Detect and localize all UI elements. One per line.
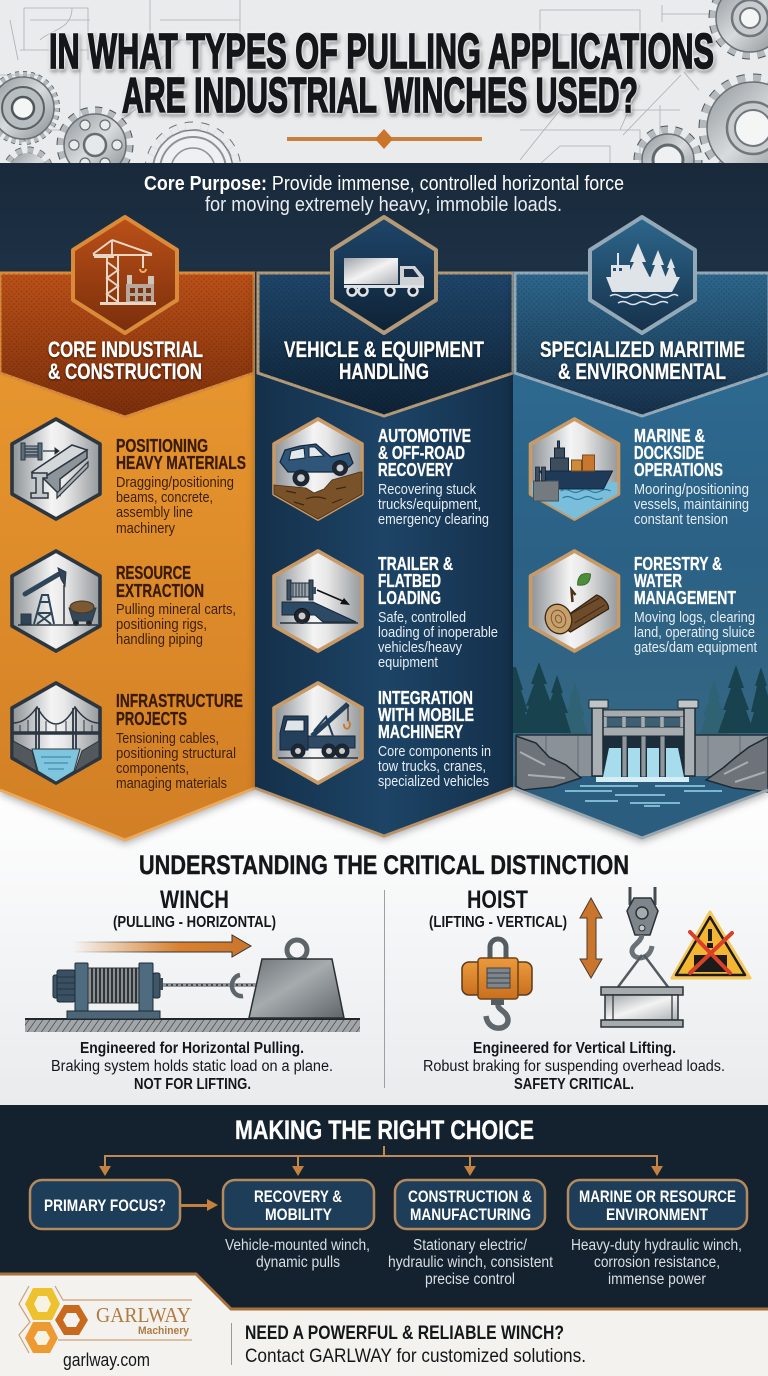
recovery recommendation: dynamic pulls xyxy=(256,1254,340,1271)
text xyxy=(378,688,491,790)
box: marine or resource environment: ENVIRONMENT xyxy=(606,1205,708,1224)
text: components, xyxy=(116,760,189,777)
text: Pulling mineral carts, xyxy=(116,601,236,618)
icon: warning no lifting xyxy=(672,912,750,978)
text: FLATBED xyxy=(378,571,441,591)
icon: suspension bridge xyxy=(12,683,100,783)
marine recommendation xyxy=(571,1237,742,1288)
illustration: dam and forest xyxy=(513,662,768,837)
text xyxy=(378,426,489,528)
text: vehicles/heavy xyxy=(378,639,462,656)
construction recommendation xyxy=(388,1237,554,1288)
text: MARINE & xyxy=(634,426,705,446)
text: positioning structural xyxy=(116,745,236,762)
hoist heading xyxy=(429,886,567,931)
construction recommendation: hydraulic winch, consistent xyxy=(388,1254,554,1271)
section background: critical distinction xyxy=(0,780,768,1105)
icon: cargo ship xyxy=(530,419,618,519)
icon: truck hexagon xyxy=(332,217,436,333)
panel: vehicle and equipment handling xyxy=(255,217,513,836)
text: Mooring/positioning xyxy=(634,481,749,498)
winch heading xyxy=(113,886,276,931)
text: AUTOMOTIVE xyxy=(378,426,471,446)
panel: specialized maritime and environmental xyxy=(513,217,768,838)
arrow: vertical lift xyxy=(580,898,602,978)
text: EXTRACTION xyxy=(116,581,204,601)
icon: oil pump xyxy=(12,551,100,651)
text: specialized vehicles xyxy=(378,773,489,790)
arrow: horizontal pull xyxy=(73,935,251,957)
text: POSITIONING xyxy=(116,436,208,456)
text: machinery xyxy=(116,520,175,537)
text xyxy=(116,563,236,648)
header background with gears and blueprint lines xyxy=(0,0,768,214)
winch description: NOT FOR LIFTING. xyxy=(134,1076,251,1093)
text: assembly line xyxy=(116,504,193,521)
marine recommendation: immense power xyxy=(608,1271,706,1288)
construction recommendation: Stationary electric/ xyxy=(413,1237,528,1254)
text: Tensioning cables, xyxy=(116,730,219,747)
winch description: Braking system holds static load on a plane. xyxy=(51,1058,333,1075)
gear: left xyxy=(0,74,57,142)
text xyxy=(378,554,498,671)
box: construction and manufacturing: CONSTRUCTION & xyxy=(408,1187,532,1206)
logo: garlway.com xyxy=(63,1350,150,1370)
item: marine and dockside operations xyxy=(530,419,749,528)
box: construction and manufacturing xyxy=(395,1180,545,1229)
winch description xyxy=(51,1040,333,1093)
box: primary focus: PRIMARY FOCUS? xyxy=(44,1196,166,1215)
illustration: winch pulling load xyxy=(25,940,360,1032)
gear: center left xyxy=(61,111,129,179)
item: automotive and off-road recovery xyxy=(274,419,489,528)
gear: bottom left xyxy=(6,150,50,194)
core purpose text xyxy=(144,173,624,216)
text: equipment xyxy=(378,654,439,671)
gear: top right xyxy=(713,0,768,55)
text: Safe, controlled xyxy=(378,609,466,626)
text: constant tension xyxy=(634,511,728,528)
call to action: NEED A POWERFUL & RELIABLE WINCH? xyxy=(245,1323,564,1344)
text: positioning rigs, xyxy=(116,616,207,633)
box: recovery and mobility: MOBILITY xyxy=(265,1205,333,1224)
text: tow trucks, cranes, xyxy=(378,758,486,775)
text: INTEGRATION xyxy=(378,688,473,708)
text: PROJECTS xyxy=(116,709,187,729)
call to action: Contact GARLWAY for customized solutions. xyxy=(245,1346,586,1367)
heading: & CONSTRUCTION xyxy=(48,359,202,384)
heading: critical distinction: UNDERSTANDING THE CRITICAL DISTINCTION xyxy=(139,850,629,880)
hoist description: Robust braking for suspending overhead loads. xyxy=(423,1058,725,1075)
logo xyxy=(19,1286,192,1370)
box: primary focus xyxy=(30,1180,180,1229)
text: emergency clearing xyxy=(378,511,489,528)
text: MACHINERY xyxy=(378,722,463,742)
icon: off-road vehicle xyxy=(274,419,362,519)
text: trucks/equipment, xyxy=(378,496,481,513)
item: forestry and water management xyxy=(530,551,758,656)
logo: GARLWAY xyxy=(96,1303,191,1327)
text xyxy=(116,436,246,537)
text: WATER xyxy=(634,571,682,591)
winch heading: WINCH xyxy=(160,886,229,914)
light trees xyxy=(562,680,728,734)
icon: electric hoist xyxy=(462,939,532,1028)
recovery recommendation xyxy=(225,1237,370,1271)
text: managing materials xyxy=(116,775,227,792)
text: Recovering stuck xyxy=(378,481,476,498)
gear: bottom right xyxy=(638,130,698,190)
gears xyxy=(0,0,768,214)
item: positioning heavy materials xyxy=(12,419,246,537)
box: recovery and mobility: RECOVERY & xyxy=(254,1187,342,1206)
text: MANAGEMENT xyxy=(634,588,736,608)
text: OPERATIONS xyxy=(634,460,723,480)
logo: Machinery xyxy=(138,1325,190,1337)
heading: & ENVIRONMENTAL xyxy=(558,359,726,384)
panel: core industrial and construction xyxy=(0,217,255,840)
heading xyxy=(48,337,203,384)
heading xyxy=(284,337,484,384)
hoist description: SAFETY CRITICAL. xyxy=(514,1076,634,1093)
construction recommendation: precise control xyxy=(425,1271,515,1288)
text: beams, concrete, xyxy=(116,489,213,506)
box: marine or resource environment xyxy=(568,1180,747,1229)
text xyxy=(634,554,758,656)
text: LOADING xyxy=(378,588,441,608)
item: trailer and flatbed loading xyxy=(274,551,498,671)
text: FORESTRY & xyxy=(634,554,722,574)
text: RECOVERY xyxy=(378,460,453,480)
hoist heading: HOIST xyxy=(467,886,528,914)
heading: MAKING THE RIGHT CHOICE xyxy=(235,1115,534,1145)
core purpose text: Core Purpose: Provide immense, controlled horizontal force xyxy=(144,173,624,195)
marine recommendation: Heavy-duty hydraulic winch, xyxy=(571,1237,742,1254)
flow connectors xyxy=(99,1146,663,1176)
text: WITH MOBILE xyxy=(378,705,474,725)
text xyxy=(116,691,243,792)
box: construction and manufacturing: MANUFACTURING xyxy=(410,1205,531,1224)
center divider xyxy=(384,890,385,1088)
illustration: hook and load xyxy=(601,887,683,1027)
text: handling piping xyxy=(116,631,203,648)
panel: making the right choice xyxy=(0,1105,768,1310)
item: integration with mobile machinery xyxy=(274,683,491,790)
arrow to recovery xyxy=(181,1199,218,1211)
text: RESOURCE xyxy=(116,563,191,583)
panel: winch xyxy=(25,886,360,1093)
text: INFRASTRUCTURE xyxy=(116,691,243,711)
item: infrastructure projects xyxy=(12,683,243,792)
heading: HANDLING xyxy=(339,359,429,384)
text: HEAVY MATERIALS xyxy=(116,453,246,473)
text: vessels, maintaining xyxy=(634,496,749,513)
text: TRAILER & xyxy=(378,554,453,574)
winch description: Engineered for Horizontal Pulling. xyxy=(80,1040,304,1057)
winch heading: (PULLING - HORIZONTAL) xyxy=(113,914,276,931)
icon: log xyxy=(530,551,618,651)
heading: CORE INDUSTRIAL xyxy=(48,337,203,362)
icon: steel beam xyxy=(12,419,100,519)
icon: tow truck xyxy=(274,683,362,783)
text: DOCKSIDE xyxy=(634,443,704,463)
hoist heading: (LIFTING - VERTICAL) xyxy=(429,914,567,931)
gear: right xyxy=(703,78,768,178)
call to action xyxy=(245,1323,586,1367)
icon: crane hexagon xyxy=(73,217,177,333)
item: resource extraction xyxy=(12,551,236,651)
text: loading of inoperable xyxy=(378,624,498,641)
box: recovery and mobility xyxy=(223,1180,374,1229)
icon: trailer ramp xyxy=(274,551,362,651)
icon: ship and trees hexagon xyxy=(590,217,695,333)
core purpose text: for moving extremely heavy, immobile loads. xyxy=(205,194,562,216)
heading: VEHICLE & EQUIPMENT xyxy=(284,337,484,362)
gear: outlined center xyxy=(149,126,237,214)
title xyxy=(49,25,714,123)
dark purpose band xyxy=(0,163,768,393)
text: Dragging/positioning xyxy=(116,474,234,491)
recovery recommendation: Vehicle-mounted winch, xyxy=(225,1237,370,1254)
text: Core components in xyxy=(378,743,491,760)
hoist description xyxy=(423,1040,725,1093)
hoist description: Engineered for Vertical Lifting. xyxy=(473,1040,676,1057)
panel: hoist xyxy=(423,886,750,1093)
marine recommendation: corrosion resistance, xyxy=(594,1254,720,1271)
footer panel xyxy=(0,1274,768,1376)
heading xyxy=(540,337,745,384)
dark trees xyxy=(513,662,768,733)
title divider xyxy=(287,129,482,149)
text: & OFF-ROAD xyxy=(378,443,465,463)
text xyxy=(634,426,749,528)
